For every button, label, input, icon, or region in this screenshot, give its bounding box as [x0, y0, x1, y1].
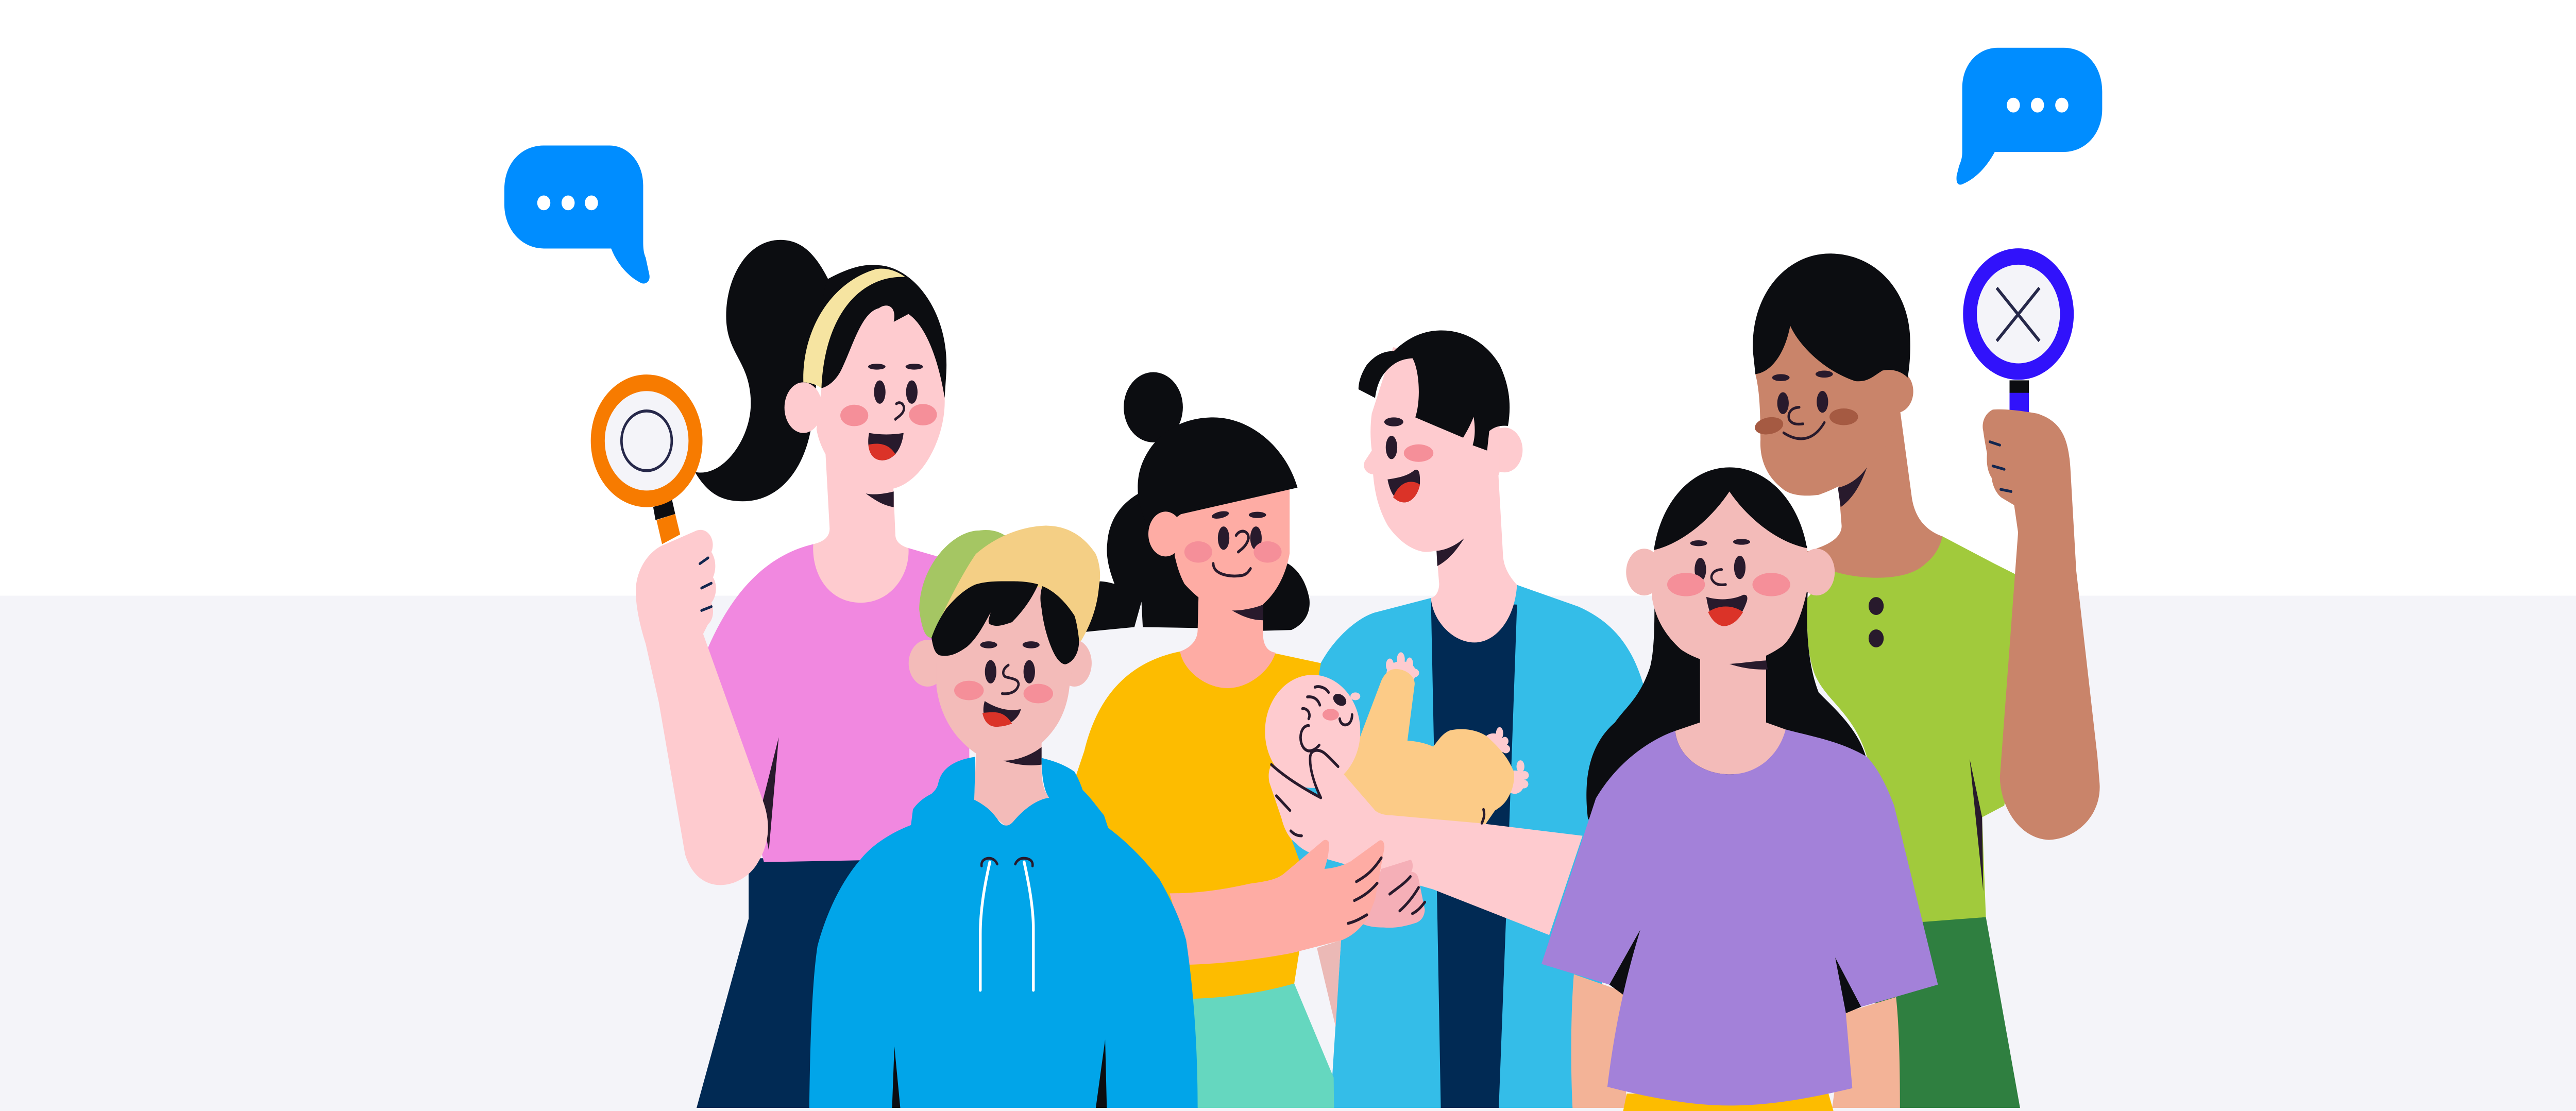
raised arm of man in green [1982, 409, 2100, 840]
magnifier with cross symbol [1963, 248, 2074, 413]
back hand [1363, 860, 1425, 928]
speech bubble right [1957, 48, 2102, 185]
speech bubble left [504, 146, 650, 283]
man in green shirt [1753, 253, 2037, 1108]
baby held in arm [1265, 652, 1583, 935]
woman in pink shirt [695, 240, 969, 1108]
raised arm of woman in pink [636, 530, 768, 885]
arm of woman in yellow [1170, 840, 1384, 965]
boy in blue hoodie [809, 526, 1198, 1108]
man in blue jacket [1290, 330, 1645, 1108]
magnifier with circle symbol [591, 374, 703, 544]
woman in yellow shirt [1068, 372, 1341, 1108]
woman in purple shirt [1541, 467, 1938, 1111]
long hair of woman in purple [1586, 488, 1867, 839]
